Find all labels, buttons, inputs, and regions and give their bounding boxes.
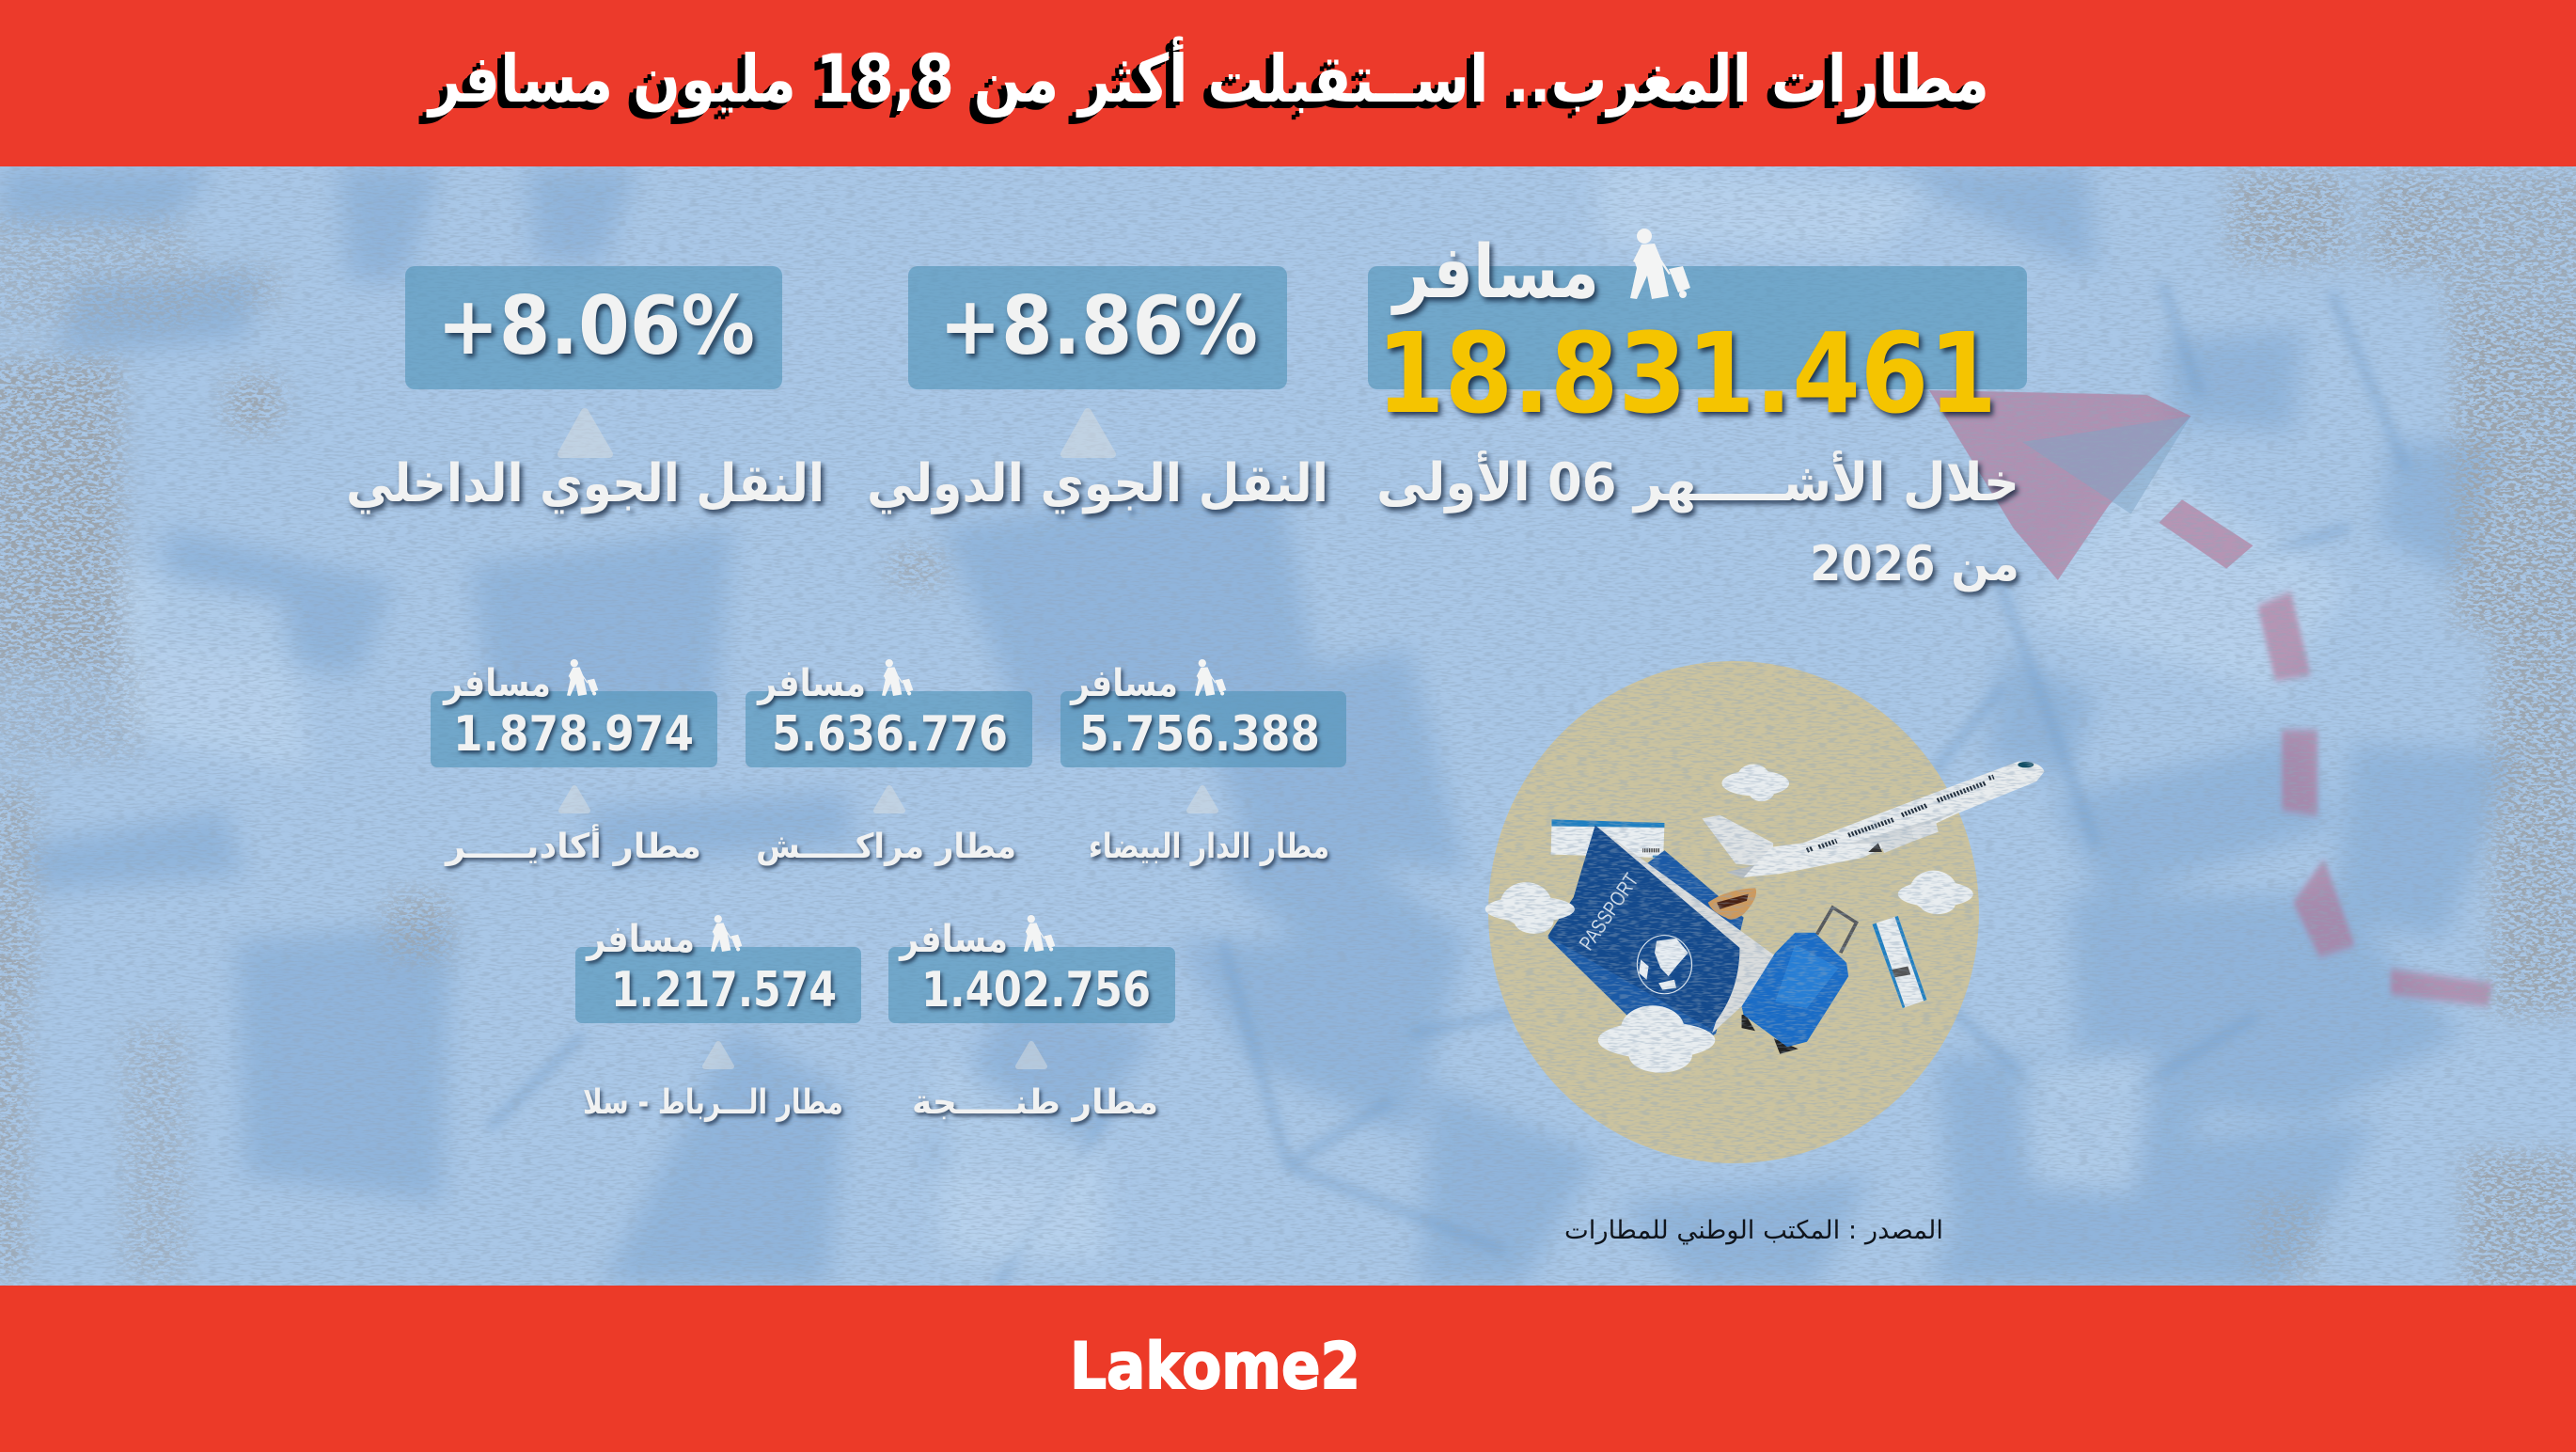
label: النقل الجوي الداخلي xyxy=(346,453,825,514)
panel: Casablanca airport xyxy=(1060,659,1346,866)
paper plane and dashed flight path xyxy=(1929,390,2492,1006)
airport name: مطار مراكـــــش xyxy=(756,828,1016,866)
icon: boarding ticket xyxy=(1872,916,1927,1008)
value box xyxy=(746,691,1032,767)
percentage box xyxy=(908,266,1287,389)
icon: traveller xyxy=(1630,229,1690,299)
panel: domestic air transport xyxy=(346,266,825,514)
paper grain and grit texture xyxy=(0,166,2576,1286)
value box xyxy=(1060,691,1346,767)
percentage value: +8.06% xyxy=(437,279,755,373)
panel: Agadir airport xyxy=(431,659,717,866)
airport name: مطار الـــرباط - سلا xyxy=(583,1083,843,1122)
total unit label: مسافر xyxy=(1390,230,1599,315)
top banner xyxy=(0,0,2576,166)
icon: traveller xyxy=(1024,915,1055,952)
pointer xyxy=(1064,412,1112,454)
unit: مسافر xyxy=(898,918,1008,961)
value box xyxy=(431,691,717,767)
panel: international air transport xyxy=(867,266,1328,514)
pointer xyxy=(1018,1044,1045,1066)
value box xyxy=(888,947,1175,1023)
icon: suitcase xyxy=(1742,908,1857,1052)
unit: مسافر xyxy=(585,918,695,961)
airport name: مطار طنـــــجة xyxy=(912,1083,1158,1122)
icon: traveller xyxy=(882,659,913,696)
label: النقل الجوي الدولي xyxy=(867,453,1328,514)
pointer xyxy=(561,412,609,454)
percentage box xyxy=(405,266,782,389)
value: 1.878.974 xyxy=(453,706,694,763)
illustration background circle xyxy=(1488,661,1979,1163)
unit: مسافر xyxy=(442,662,551,705)
unit: مسافر xyxy=(756,662,866,705)
pointer xyxy=(705,1044,731,1066)
total number: 18.831.461 xyxy=(1376,308,1997,438)
icon: traveller xyxy=(1195,659,1226,696)
value: 5.636.776 xyxy=(772,706,1008,763)
period caption line one: خلال الأشـــــهر 06 الأولى xyxy=(1376,450,2019,513)
percentage value: +8.86% xyxy=(939,279,1258,373)
icon: clouds xyxy=(1485,764,1973,1073)
panel: Tangier airport xyxy=(888,915,1175,1122)
background: crumpled blue paper xyxy=(0,160,2576,1286)
title: مطارات المغرب.. اســتقبلت أكثر من 18,8 مليون مسافر xyxy=(426,36,1989,118)
pointer xyxy=(1189,788,1216,811)
unit: مسافر xyxy=(1069,662,1178,705)
icon: hat xyxy=(1708,888,1756,920)
icon: passport xyxy=(1547,825,1787,1064)
illustration: passport, suitcase, plane, tickets and clouds xyxy=(1485,762,2045,1073)
value: 5.756.388 xyxy=(1079,706,1320,763)
total box xyxy=(1368,266,2027,389)
icon: traveller xyxy=(711,915,742,952)
airport name: مطار أكاديـــــر xyxy=(444,824,701,866)
value: 1.217.574 xyxy=(611,962,837,1018)
pointer xyxy=(876,788,903,811)
panel: Rabat-Sale airport xyxy=(575,915,861,1122)
panel: total passengers xyxy=(1368,229,2027,592)
value: 1.402.756 xyxy=(921,962,1151,1018)
icon: airplane xyxy=(1702,762,2045,878)
source note: المصدر : المكتب الوطني للمطارات xyxy=(1564,1216,1943,1245)
footer brand: Lakome2 xyxy=(1070,1330,1360,1404)
pointer xyxy=(561,788,588,811)
passport label: PASSPORT xyxy=(1574,869,1643,955)
period caption line two: من 2026 xyxy=(1810,536,2019,592)
value box xyxy=(575,947,861,1023)
icon: air ticket xyxy=(1551,819,1664,858)
panel: Marrakech airport xyxy=(746,659,1032,866)
icon: traveller xyxy=(567,659,598,696)
bottom banner xyxy=(0,1286,2576,1452)
airport name: مطار الدار البيضاء xyxy=(1089,828,1329,866)
